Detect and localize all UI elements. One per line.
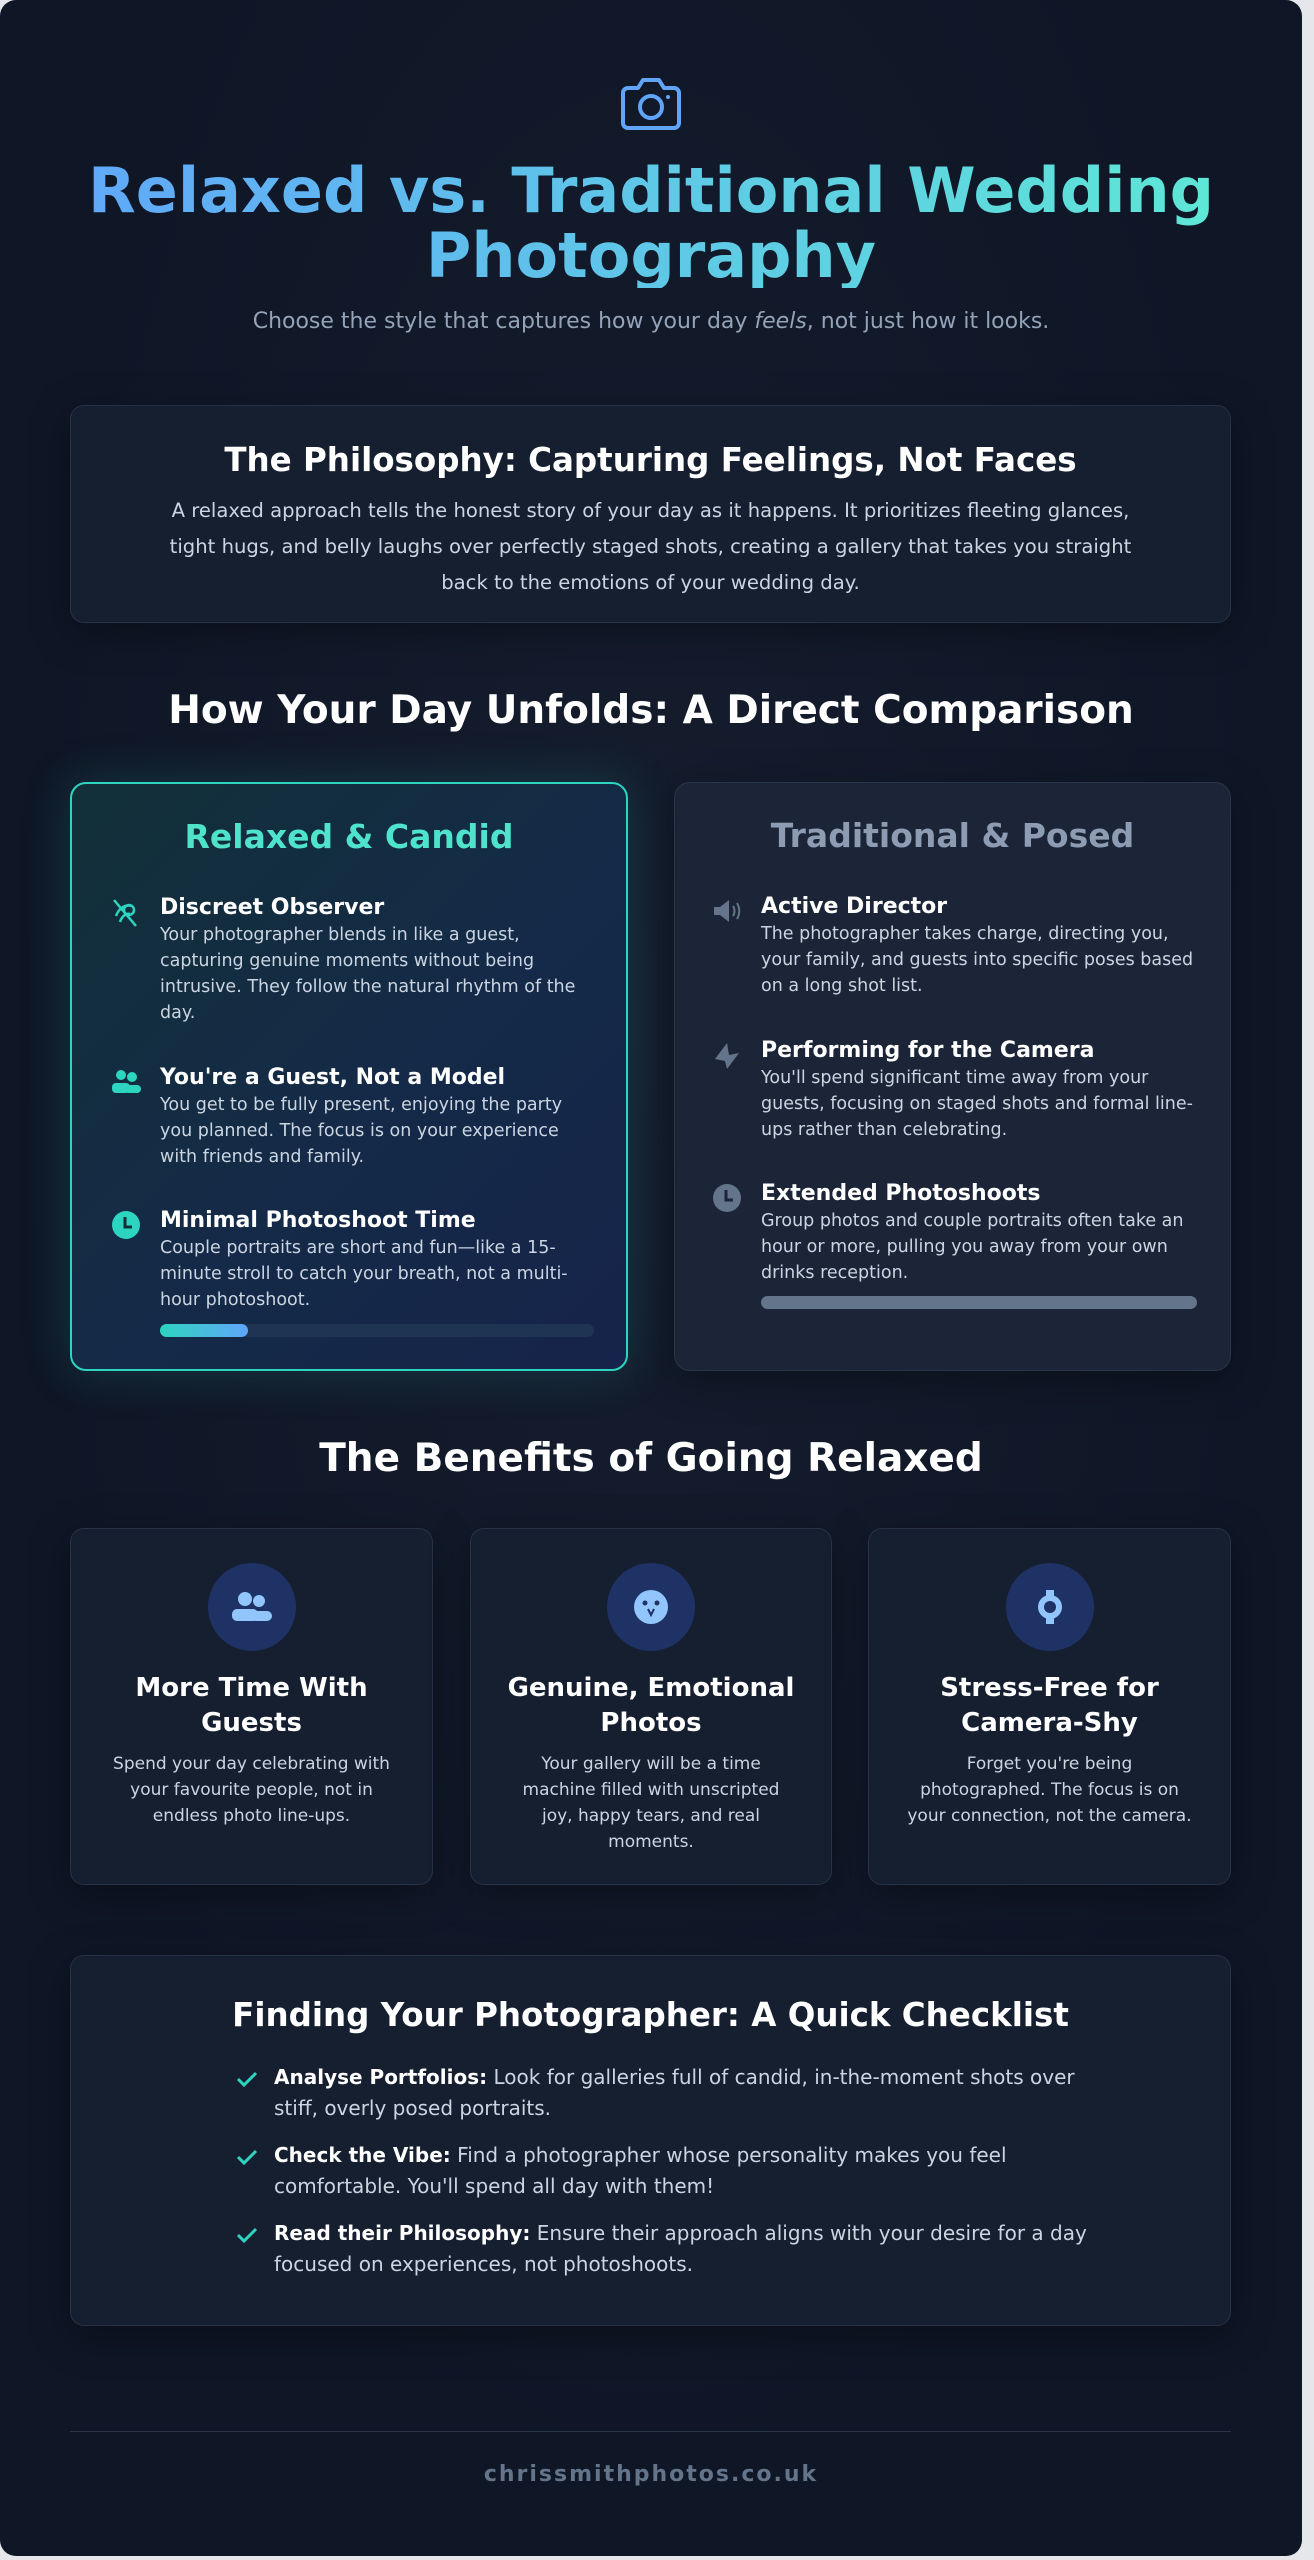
checklist item 2: Check the Vibe: Find a photographer whose personality makes you feel comfortable. You'll spend all day with them! [274, 2143, 1007, 2198]
item: guest not model [112, 1065, 562, 1167]
panel: benefit genuine photos: Your gallery will be a time machine filled with unscripted joy, happy tears, and real moments. [523, 1754, 779, 1852]
item: guest not model: You're a Guest, Not a Model [160, 1065, 505, 1090]
item: discreet observer [113, 895, 575, 1023]
item: extended photoshoots: Group photos and couple portraits often take an hour or more, pulling you away from your own drinks reception. [761, 1211, 1183, 1283]
progress bar: relaxed [160, 1324, 594, 1337]
item: performing: Performing for the Camera [761, 1038, 1094, 1063]
panel: benefit genuine photos: Photos [600, 1708, 702, 1738]
checklist item 1: Analyse Portfolios: Look for galleries full of candid, in-the-moment shots over stiff, overly posed portraits. [274, 2065, 1075, 2120]
icon: people [208, 1563, 296, 1651]
item: active director: The photographer takes charge, directing you, your family, and guests into specific poses based on a long shot list. [761, 924, 1193, 996]
panel: checklist [70, 1955, 1231, 2326]
item: active director [714, 894, 1193, 996]
panel: benefit more time [70, 1528, 433, 1885]
panel: traditional & posed [674, 782, 1231, 1371]
item: minimal photoshoot [112, 1208, 568, 1310]
panel: relaxed & candid [70, 782, 628, 1371]
heading: benefits: The Benefits of Going Relaxed [319, 1436, 983, 1481]
heading: philosophy: The Philosophy: Capturing Feelings, Not Faces [224, 441, 1077, 479]
subtitle: Choose the style that captures how your day feels, not just how it looks. [253, 309, 1049, 334]
panel: benefit stress-free: Stress-Free for [940, 1673, 1159, 1703]
checklist item 3: Read their Philosophy: Ensure their approach aligns with your desire for a day focused on experiences, not photoshoots. [274, 2221, 1087, 2276]
item: extended photoshoots [713, 1181, 1183, 1283]
panel: benefit stress-free: Forget you're being photographed. The focus is on your connection, not the camera. [907, 1754, 1192, 1826]
panel: benefit more time: Guests [201, 1708, 302, 1738]
text: philosophy body: A relaxed approach tells the honest story of your day as it happens. It prioritizes fleeting glances, tight hugs, and belly laughs over perfectly staged shots, creating a gallery that takes you straight back to the emotions of your wedding day. [170, 499, 1131, 594]
card title: traditional: Traditional & Posed [771, 816, 1134, 855]
item: active director: Active Director [761, 894, 947, 919]
title: Relaxed vs. Traditional Wedding [88, 154, 1214, 227]
icon: gear [1006, 1563, 1094, 1651]
heading: checklist: Finding Your Photographer: A Quick Checklist [232, 1996, 1069, 2034]
item: extended photoshoots: Extended Photoshoots [761, 1181, 1041, 1206]
panel: benefit genuine photos [470, 1528, 832, 1885]
item: guest not model: You get to be fully present, enjoying the party you planned. The focus is on your experience with friends and family. [160, 1095, 562, 1167]
progress bar: traditional [761, 1296, 1197, 1309]
panel: philosophy [70, 405, 1231, 623]
item: discreet observer: Your photographer blends in like a guest, capturing genuine moments without being intrusive. They follow the natural rhythm of the day. [160, 925, 575, 1023]
item: minimal photoshoot: Couple portraits are short and fun—like a 15-minute stroll to catch your breath, not a multi-hour photoshoot. [160, 1238, 568, 1310]
title [88, 154, 1214, 292]
footer: chrissmithphotos.co.uk [484, 2462, 818, 2487]
item: performing [715, 1038, 1193, 1140]
heading: comparison: How Your Day Unfolds: A Direct Comparison [168, 688, 1134, 733]
item: discreet observer: Discreet Observer [160, 895, 384, 920]
panel: benefit stress-free [868, 1528, 1231, 1885]
title: Photography [426, 219, 876, 292]
item: performing: You'll spend significant time away from your guests, focusing on staged shots and formal line-ups rather than celebrating. [761, 1068, 1193, 1140]
icon: smile [607, 1563, 695, 1651]
panel: benefit more time: More Time With [135, 1673, 368, 1703]
panel: benefit stress-free: Camera-Shy [961, 1708, 1138, 1738]
panel: benefit genuine photos: Genuine, Emotional [508, 1673, 794, 1703]
panel: benefit more time: Spend your day celebrating with your favourite people, not in endless photo line-ups. [113, 1754, 390, 1826]
item: minimal photoshoot: Minimal Photoshoot Time [160, 1208, 476, 1233]
card title: relaxed: Relaxed & Candid [185, 817, 513, 856]
icon: camera [621, 78, 681, 130]
